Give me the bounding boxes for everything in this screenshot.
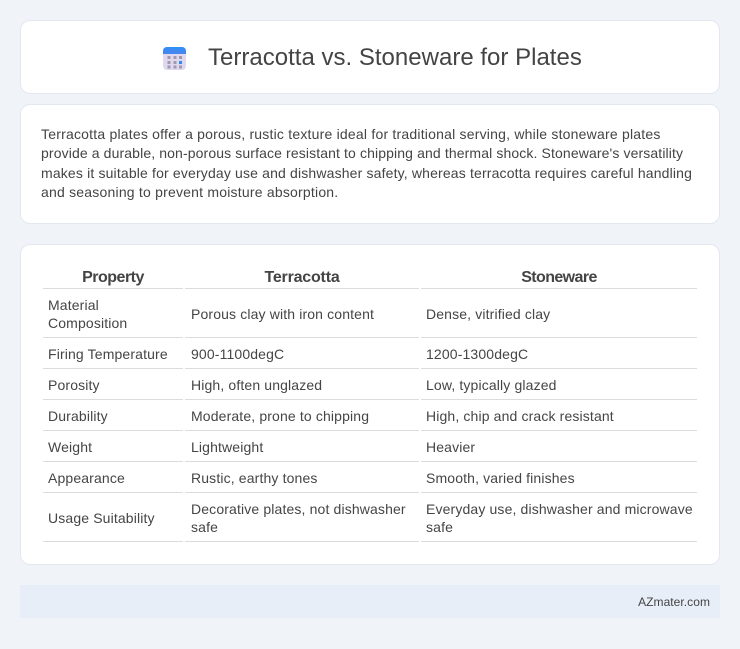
row: durability: Moderate, prone to chipping [191,408,369,424]
intro text: and seasoning to prevent moisture absorption. [41,184,338,200]
row: appearance: Smooth, varied finishes [426,470,575,486]
row: appearance: Rustic, earthy tones [191,470,318,486]
header card [20,20,720,94]
column headers [43,269,697,289]
row: appearance [48,470,575,486]
row: weight [48,439,475,455]
intro text: provide a durable, non-porous surface resistant to chipping and thermal shock. Stoneware's versatility [41,145,683,161]
row: usage suitability: safe [191,519,218,535]
column headers: Property [82,269,144,286]
intro text: makes it suitable for everyday use and dishwasher safety, whereas terracotta requires careful handling [41,164,692,180]
footer bar [20,585,720,618]
title: Terracotta vs. Stoneware for Plates [208,44,582,71]
footer credit: AZmater.com [638,595,710,609]
row: usage suitability [48,501,693,535]
row: usage suitability: Usage Suitability [48,510,155,526]
row: weight: Weight [48,439,92,455]
column headers: Stoneware [521,269,597,286]
row: porosity: High, often unglazed [191,377,322,393]
row: firing temperature: 1200-1300degC [426,346,528,362]
column headers: Terracotta [264,269,340,286]
row: porosity: Low, typically glazed [426,377,557,393]
row: weight: Heavier [426,439,475,455]
row: weight: Lightweight [191,439,263,455]
row: firing temperature: Firing Temperature [48,346,168,362]
row: firing temperature: 900-1100degC [191,346,284,362]
row: material composition: Material [48,297,99,313]
row: durability: High, chip and crack resistant [426,408,614,424]
intro paragraph card [20,104,720,224]
row: material composition: Dense, vitrified clay [426,306,550,322]
row: firing temperature [48,346,528,362]
icon: calendar [163,47,186,70]
row: porosity: Porosity [48,377,100,393]
row: material composition: Composition [48,315,127,331]
row: durability: Durability [48,408,108,424]
row: usage suitability: safe [426,519,453,535]
row: material composition [48,297,550,331]
row: durability [48,408,614,424]
row: usage suitability: Decorative plates, not dishwasher [191,501,406,517]
row: usage suitability: Everyday use, dishwasher and microwave [426,501,693,517]
row: porosity [48,377,557,393]
row: material composition: Porous clay with iron content [191,306,374,322]
intro text [41,126,692,200]
row: appearance: Appearance [48,470,125,486]
intro text: Terracotta plates offer a porous, rustic texture ideal for traditional serving, while stoneware plates [41,126,661,142]
comparison table card [20,244,720,565]
